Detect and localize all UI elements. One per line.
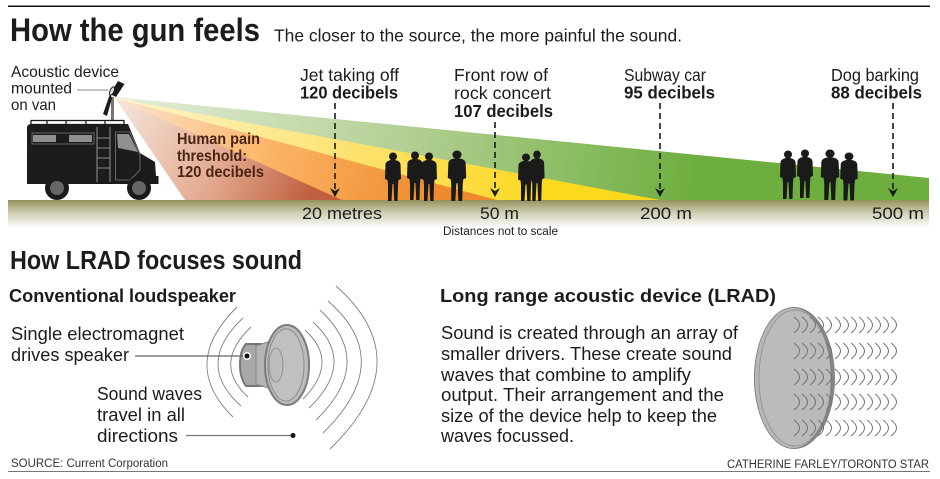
ground band: [8, 200, 929, 228]
silhouettes: group near 50 m: [385, 151, 545, 201]
panel: LRAD: [440, 285, 896, 449]
marker: rock concert: rock concert: [454, 83, 551, 103]
sound beams chart: [115, 97, 929, 200]
mast: [111, 97, 114, 125]
panel heading: Conventional loudspeaker: [9, 285, 236, 306]
marker: dog barking: Dog barking: [831, 65, 919, 85]
subtitle: The closer to the source, the more painful the sound.: [274, 26, 682, 46]
icon: speaker: [240, 325, 309, 405]
van body: [27, 124, 158, 184]
panel: conventional loudspeaker: [9, 285, 377, 449]
marker: dog barking: [831, 65, 922, 197]
marker: subway car: Subway car: [624, 65, 706, 85]
distance labels: [302, 204, 924, 223]
marker: subway car: 95 decibels: [624, 82, 715, 102]
LRAD description: Sound is created through an array of: [441, 323, 739, 343]
beam: green zone: [115, 97, 929, 200]
label: sound waves: directions: [97, 426, 178, 446]
note: distances: Distances not to scale: [443, 226, 558, 238]
marker: rock concert: Front row of: [454, 65, 548, 85]
cab door and window: [116, 132, 140, 180]
distance labels: 200 m: [640, 204, 692, 223]
label: acoustic device: mounted: [11, 80, 72, 98]
wheels: [45, 176, 151, 200]
heading: how LRAD focuses sound: How LRAD focuses sound: [10, 247, 302, 275]
acoustic device: [103, 81, 124, 116]
label: sound waves: travel in all: [97, 405, 185, 425]
marker: jet taking off: [300, 65, 399, 197]
label: pain threshold: threshold:: [177, 148, 247, 165]
ladder: [97, 127, 110, 182]
LRAD description: smaller drivers. These create sound: [441, 344, 732, 364]
label: acoustic device: on van: [11, 97, 56, 114]
panel heading: Long range acoustic device (LRAD): [440, 285, 776, 306]
label: sound waves: [97, 384, 202, 446]
source: SOURCE: Current Corporation: [11, 458, 168, 470]
icon: LRAD dish: [754, 307, 835, 449]
silhouettes: group near 500 m: [780, 150, 858, 201]
label: pain threshold: [177, 131, 264, 181]
distance labels: 50 m: [480, 204, 519, 223]
LRAD description: waves that combine to amplify: [440, 365, 691, 385]
beam: orange zone: [115, 98, 497, 200]
credit: CATHERINE FARLEY/TORONTO STAR: [727, 459, 929, 471]
leader line: sound waves: [186, 433, 296, 438]
LRAD description: size of the device help to keep the: [441, 406, 717, 426]
leader line: device: [77, 89, 108, 91]
beam: red pain zone: [115, 98, 342, 200]
side windows: [32, 133, 94, 144]
label: electromagnet: Single electromagnet: [11, 324, 184, 344]
label: pain threshold: Human pain: [177, 131, 260, 148]
marker: rock concert: [454, 65, 553, 197]
label: electromagnet: drives speaker: [11, 345, 129, 365]
marker: jet taking off: Jet taking off: [300, 65, 399, 85]
sound waves: left: [207, 307, 251, 417]
label: pain threshold: 120 decibels: [177, 164, 264, 181]
beam: yellow zone: [115, 98, 660, 200]
leader line: electromagnet: [135, 352, 251, 360]
sound waves: right: [303, 286, 377, 449]
label: sound waves: Sound waves: [97, 384, 202, 404]
label: acoustic device: [11, 64, 119, 114]
distance labels: 20 metres: [302, 204, 382, 223]
sound waves: LRAD rows: [794, 317, 896, 436]
roof rack: [31, 120, 124, 124]
marker: subway car: [624, 65, 715, 197]
marker: rock concert: 107 decibels: [454, 101, 553, 121]
label: electromagnet: [11, 324, 184, 365]
LRAD description: [440, 323, 739, 446]
van with acoustic device: [27, 81, 158, 200]
LRAD description: waves focussed.: [440, 426, 574, 446]
distance labels: 500 m: [872, 204, 924, 223]
label: acoustic device: Acoustic device: [11, 64, 119, 81]
marker: dog barking: 88 decibels: [831, 82, 922, 102]
LRAD description: output. Their arrangement and the: [441, 385, 724, 405]
marker: jet taking off: 120 decibels: [300, 82, 398, 102]
title: How the gun feels: [10, 12, 260, 48]
